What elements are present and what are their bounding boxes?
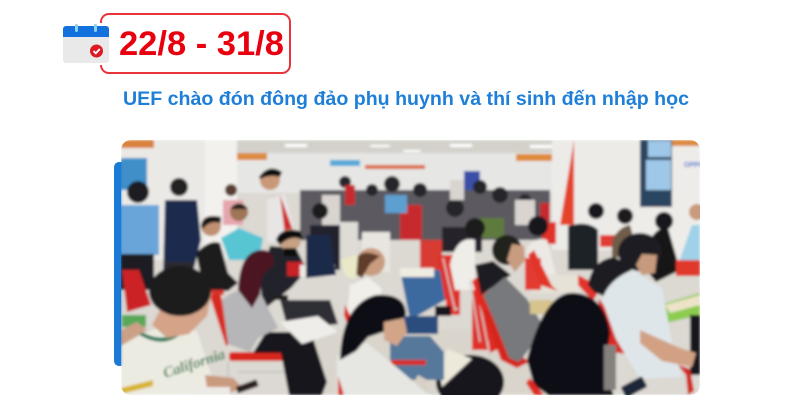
chairs mid — [342, 305, 353, 324]
walls and ceiling — [121, 192, 700, 395]
phone — [621, 376, 647, 398]
accent bar — [114, 162, 126, 366]
photo: admissions hall with students: OPPO — [684, 162, 705, 169]
tie-dye shirt boy — [483, 277, 545, 362]
boy navy and papers — [306, 235, 336, 278]
back crowd — [300, 190, 550, 240]
floor — [344, 334, 536, 382]
seated jeans + front girl — [390, 336, 444, 380]
left background people — [163, 200, 201, 280]
date badge — [100, 13, 291, 74]
boy in black tee — [196, 242, 238, 291]
front boy in California tee — [121, 327, 213, 395]
man in cyan shirt — [221, 228, 263, 260]
photo: admissions hall with students — [121, 140, 700, 395]
heading: UEF chào đón đông đảo phụ huynh và thí sinh đến nhập học — [123, 88, 689, 110]
white-shirt man — [602, 270, 682, 379]
dark-top seated back — [588, 257, 634, 297]
masked boy in black jacket — [260, 246, 307, 310]
chair + grey hoodie girl — [210, 292, 232, 346]
front bottom head — [434, 354, 506, 395]
seated right group — [450, 239, 475, 290]
woman pink + man in red-white shirt — [223, 200, 243, 225]
ponytail girl — [346, 277, 382, 318]
long-hair girl — [527, 293, 614, 395]
date badge: 22/8 - 31/8 — [119, 25, 284, 63]
photo: admissions hall with students: California — [161, 347, 228, 382]
